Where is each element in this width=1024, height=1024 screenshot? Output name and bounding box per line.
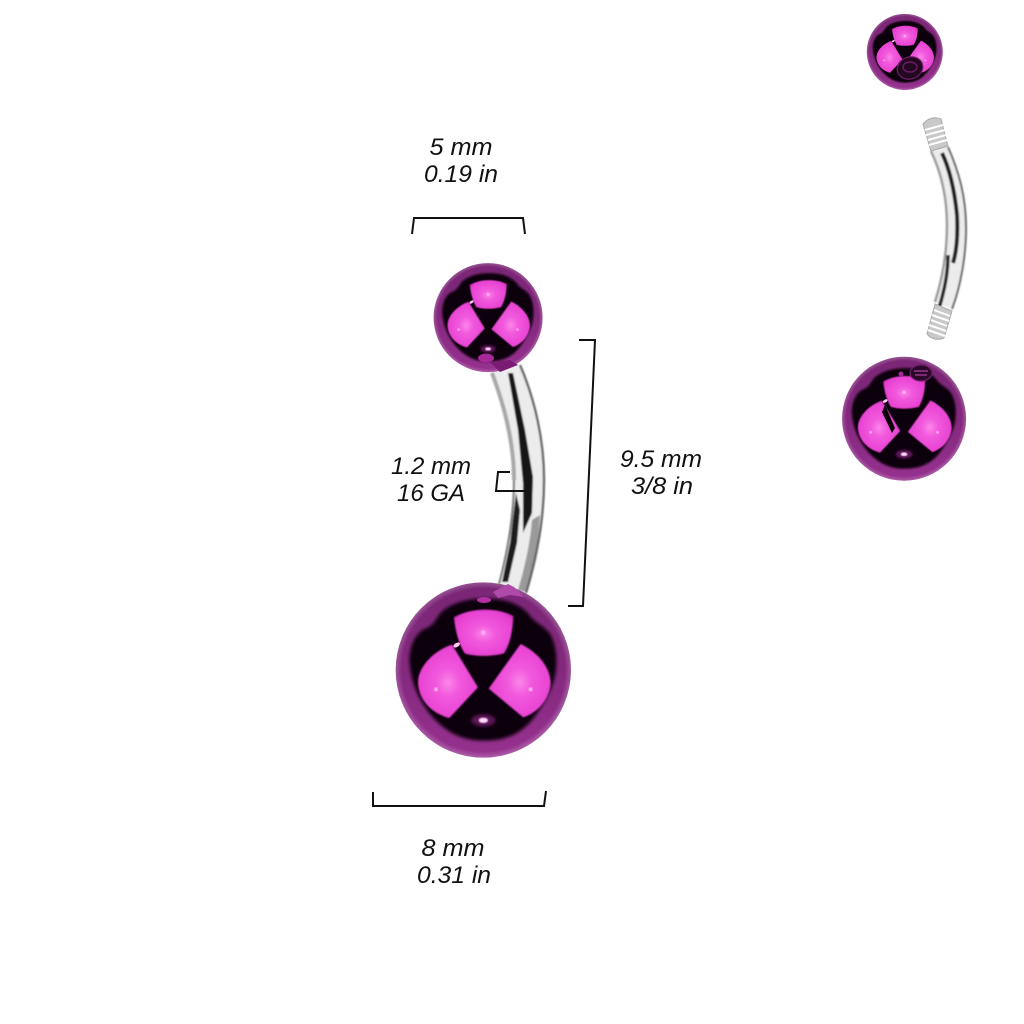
label: top ball size: 5 mm xyxy=(430,134,492,161)
label: shaft length xyxy=(620,446,702,500)
bracket: gauge xyxy=(496,472,526,491)
label: bottom ball size: 0.31 in xyxy=(417,862,491,889)
small upper ball xyxy=(434,263,543,372)
bracket: bottom ball width xyxy=(373,791,546,806)
label: bottom ball size xyxy=(417,835,491,889)
label: bottom ball size: 8 mm xyxy=(422,835,484,862)
detail: threaded shaft xyxy=(923,118,967,339)
label: shaft length: 3/8 in xyxy=(631,473,693,500)
barbell shaft xyxy=(491,364,545,594)
label: gauge: 16 GA xyxy=(397,480,465,507)
top thread xyxy=(923,118,948,151)
label: top ball size: 0.19 in xyxy=(424,161,498,188)
bracket: top ball width xyxy=(412,218,525,234)
label: shaft length: 9.5 mm xyxy=(620,446,702,473)
large lower ball xyxy=(396,582,571,758)
detail: small ball with threaded hole xyxy=(867,14,943,90)
bracket: shaft length xyxy=(568,340,595,606)
label: top ball size xyxy=(424,134,498,188)
label: gauge xyxy=(391,453,471,507)
bottom thread xyxy=(927,304,952,339)
detail: large ball with threaded hole xyxy=(842,357,966,481)
label: gauge: 1.2 mm xyxy=(391,453,471,480)
